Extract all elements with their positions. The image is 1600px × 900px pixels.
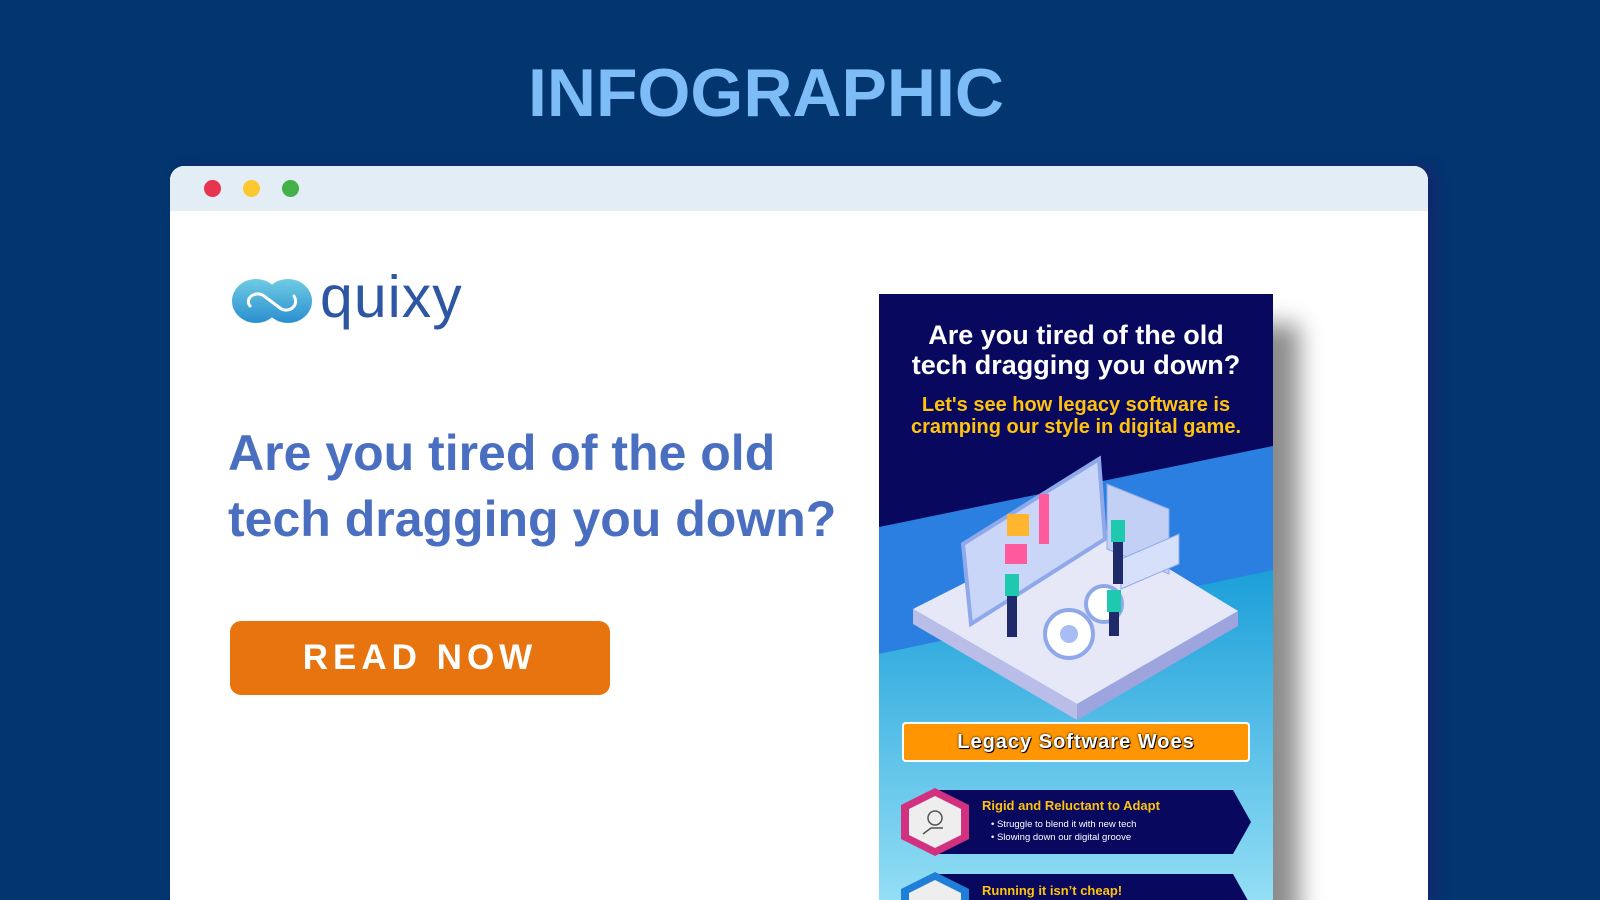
banner: legacy software woes: Legacy Software Woes [957, 731, 1195, 753]
item 1: rigid and reluctant: • Slowing down our digital groove [991, 832, 1131, 843]
window dots [204, 180, 299, 197]
infographic title: Are you tired of the old [928, 320, 1224, 350]
logo: quixy [232, 264, 463, 330]
item 1: rigid and reluctant: Rigid and Reluctant to Adapt [982, 798, 1160, 813]
item 2: running it isn't cheap: Running it isn’t cheap! [982, 883, 1122, 898]
item 1: rigid and reluctant [901, 788, 1251, 856]
icon: infinity logo [232, 279, 312, 323]
main heading: tech dragging you down? [228, 491, 836, 547]
banner: legacy software woes [902, 722, 1250, 762]
infographic title [912, 320, 1240, 380]
infographic subtitle: cramping our style in digital game. [911, 416, 1241, 438]
background bands [879, 446, 1273, 900]
browser top bar [170, 166, 1428, 211]
browser window [170, 166, 1428, 900]
infographic subtitle: Let's see how legacy software is [922, 394, 1230, 416]
infographic subtitle [911, 394, 1241, 438]
logo: quixy: quixy [320, 264, 463, 330]
main heading: Are you tired of the old [228, 425, 775, 481]
infographic preview [879, 294, 1273, 900]
item 1: rigid and reluctant: • Struggle to blend it with new tech [991, 819, 1136, 830]
main heading [228, 425, 836, 547]
button: read now: READ NOW [303, 638, 537, 677]
infographic title: tech dragging you down? [912, 350, 1240, 380]
title: INFOGRAPHIC [528, 55, 1004, 131]
illustration: isometric platform [913, 456, 1238, 720]
button: read now [230, 621, 610, 695]
item 2: running it isn't cheap [901, 872, 1248, 900]
